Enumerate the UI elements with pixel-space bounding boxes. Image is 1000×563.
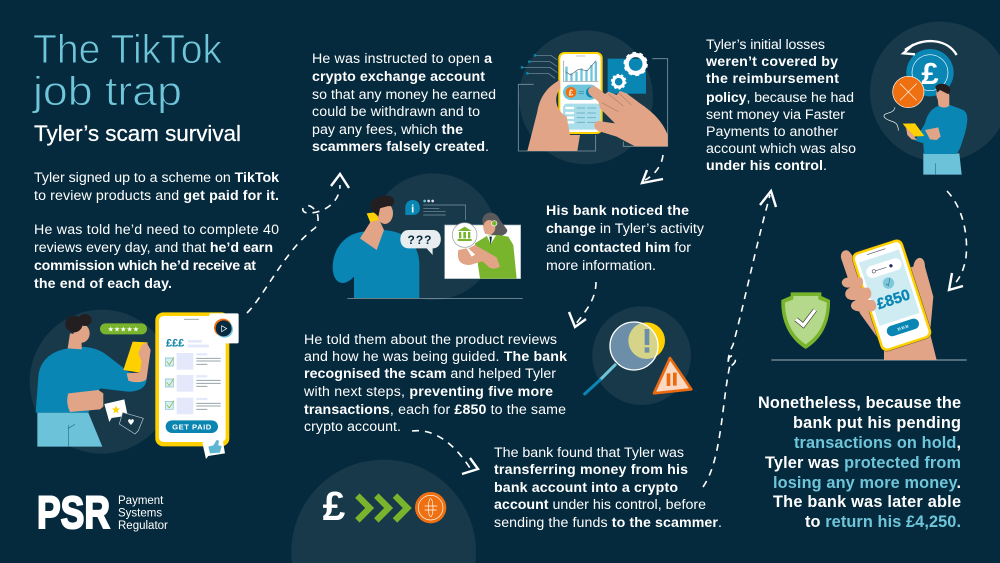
text block: initial losses: Payments to another [706, 124, 838, 140]
rating pill: ★★★★★ [108, 326, 139, 334]
text block: intro: He was told he’d need to complete 40 [34, 222, 279, 238]
text block: conclusion [758, 394, 961, 531]
icon: warning triangle [654, 358, 691, 393]
text block: bank found transfers: bank account into a crypto [494, 480, 678, 496]
phone: £850 [875, 286, 912, 313]
text block: crypto exchange account: crypto exchange account [312, 69, 485, 85]
text block: bank found transfers: transferring money from his [494, 462, 688, 478]
illustration: refused pound reimbursement: £ [921, 56, 939, 91]
text block: bank noticed: His bank noticed the [546, 203, 689, 219]
arrow: to product reviews text [569, 282, 596, 327]
text block: bank recognised the scam: and how he was being guided. The bank [304, 349, 567, 365]
phone with review list [155, 312, 229, 446]
phone: »»» [896, 321, 910, 333]
video card [209, 313, 239, 343]
title: job trap [32, 68, 182, 114]
illustration: pound to crypto transfer: £ [323, 483, 346, 529]
text block: crypto exchange account: He was instructed to open a [312, 51, 492, 67]
star bubble [104, 399, 128, 422]
illustration: phone with held transaction and shield [771, 238, 967, 360]
heart bubble: ♥ [127, 418, 135, 427]
arrow: to phone illustration [947, 191, 967, 290]
logo: PSR: PSR [37, 487, 110, 538]
title: The TikTok [33, 26, 222, 72]
arrow: to bank found text [412, 431, 478, 474]
green chevrons [357, 496, 407, 520]
text block: bank found transfers: account under his control, before [494, 497, 706, 513]
illustration: magnifying glass and warning [585, 306, 691, 405]
text block: crypto exchange account: scammers falsely created. [312, 139, 489, 155]
text block: initial losses: Tyler’s initial losses [706, 37, 825, 53]
rating pill [100, 323, 147, 334]
text block: conclusion: Tyler was protected from [765, 454, 961, 472]
text block: initial losses: under his control. [706, 158, 827, 174]
question speech bubble: ??? [408, 233, 432, 247]
text block: bank recognised the scam: with next steps, preventing five more [303, 384, 553, 400]
logo: PSR: Regulator [118, 520, 168, 532]
phone with review list: £££ [166, 338, 184, 350]
thumbs up bubble [202, 437, 225, 459]
text block: intro: commission which he’d receive at [34, 258, 256, 274]
exclamation [645, 329, 649, 353]
text block: bank noticed: more information. [546, 258, 656, 274]
text block: intro: Tyler signed up to a scheme on TikTok [34, 170, 279, 186]
phone [850, 238, 933, 353]
text block: crypto exchange account: could be withdrawn and to [312, 104, 480, 120]
illustration: pound to crypto transfer [291, 460, 476, 563]
text block: intro: reviews every day, and that he’d earn [34, 240, 273, 256]
text block: conclusion: to return his £4,250. [805, 513, 961, 531]
text block: initial losses: policy, because he had [706, 90, 854, 106]
text block: conclusion: losing any more money. [773, 474, 961, 492]
illustration: phone call with bank [333, 173, 523, 300]
text block: crypto exchange account: pay any fees, which the [312, 122, 463, 138]
logo: PSR: Payment [118, 495, 164, 507]
text block: bank found transfers [494, 445, 722, 531]
text block: bank found transfers: sending the funds to the scammer. [494, 515, 722, 531]
text block: initial losses [705, 37, 856, 174]
text block: conclusion: bank put his pending [793, 414, 961, 432]
illustration: banking app on phone: £ [569, 88, 574, 97]
circular arrow [903, 41, 957, 55]
text block: conclusion: The bank was later able [773, 493, 961, 511]
text block: bank recognised the scam [303, 332, 567, 435]
text block: intro: to review products and get paid for it. [34, 188, 279, 204]
text block: initial losses: the reimbursement [706, 71, 839, 87]
text block: crypto exchange account: so that any money he earned [312, 87, 496, 103]
text block: bank noticed: change in Tyler’s activity [546, 221, 705, 237]
text block: initial losses: sent money via Faster [706, 107, 845, 123]
title [32, 26, 222, 114]
star bubble: ★ [111, 402, 121, 416]
icon: orange cross [893, 76, 924, 108]
text block: conclusion: Nonetheless, because the [758, 394, 961, 412]
icon: crypto coin [415, 492, 446, 523]
arrow: to bank noticed text [642, 155, 663, 183]
illustration: banking app on phone [518, 30, 668, 164]
arrow: upward to initial losses [703, 191, 776, 487]
question speech bubble [400, 230, 441, 255]
heart bubble [119, 412, 143, 434]
icon: gears [612, 53, 647, 89]
text block: bank recognised the scam: He told them about the product reviews [304, 332, 557, 348]
text block: bank noticed [546, 203, 705, 274]
illustration: man reviewing products on phone [30, 310, 239, 459]
text block: bank recognised the scam: crypto account. [304, 419, 401, 435]
text block: crypto exchange account [312, 51, 496, 155]
text block: conclusion: transactions on hold, [794, 434, 961, 452]
icon: shield [781, 292, 830, 349]
bank agent panel [445, 213, 521, 279]
illustration: refused pound reimbursement [870, 22, 1000, 175]
text block: initial losses: weren’t covered by [705, 54, 838, 70]
text block: bank recognised the scam: recognised the scam and helped Tyler [304, 366, 556, 382]
icon: info [405, 200, 466, 220]
subtitle: Tyler’s scam survival [34, 121, 241, 146]
icon: bank [452, 223, 477, 247]
text block: intro [34, 170, 279, 292]
text block: intro: the end of each day. [34, 276, 172, 292]
text block: initial losses: account which was also [706, 141, 856, 157]
text block: bank recognised the scam: transactions, each for £850 to the same [304, 402, 566, 418]
text block: bank noticed: and contacted him for [546, 240, 691, 256]
icon: info: i [411, 204, 414, 216]
arrow: intro to crypto account [247, 174, 349, 313]
text block: bank found transfers: The bank found that Tyler was [494, 445, 684, 461]
phone with review list: GET PAID [172, 422, 212, 431]
logo: PSR: Systems [118, 508, 162, 520]
